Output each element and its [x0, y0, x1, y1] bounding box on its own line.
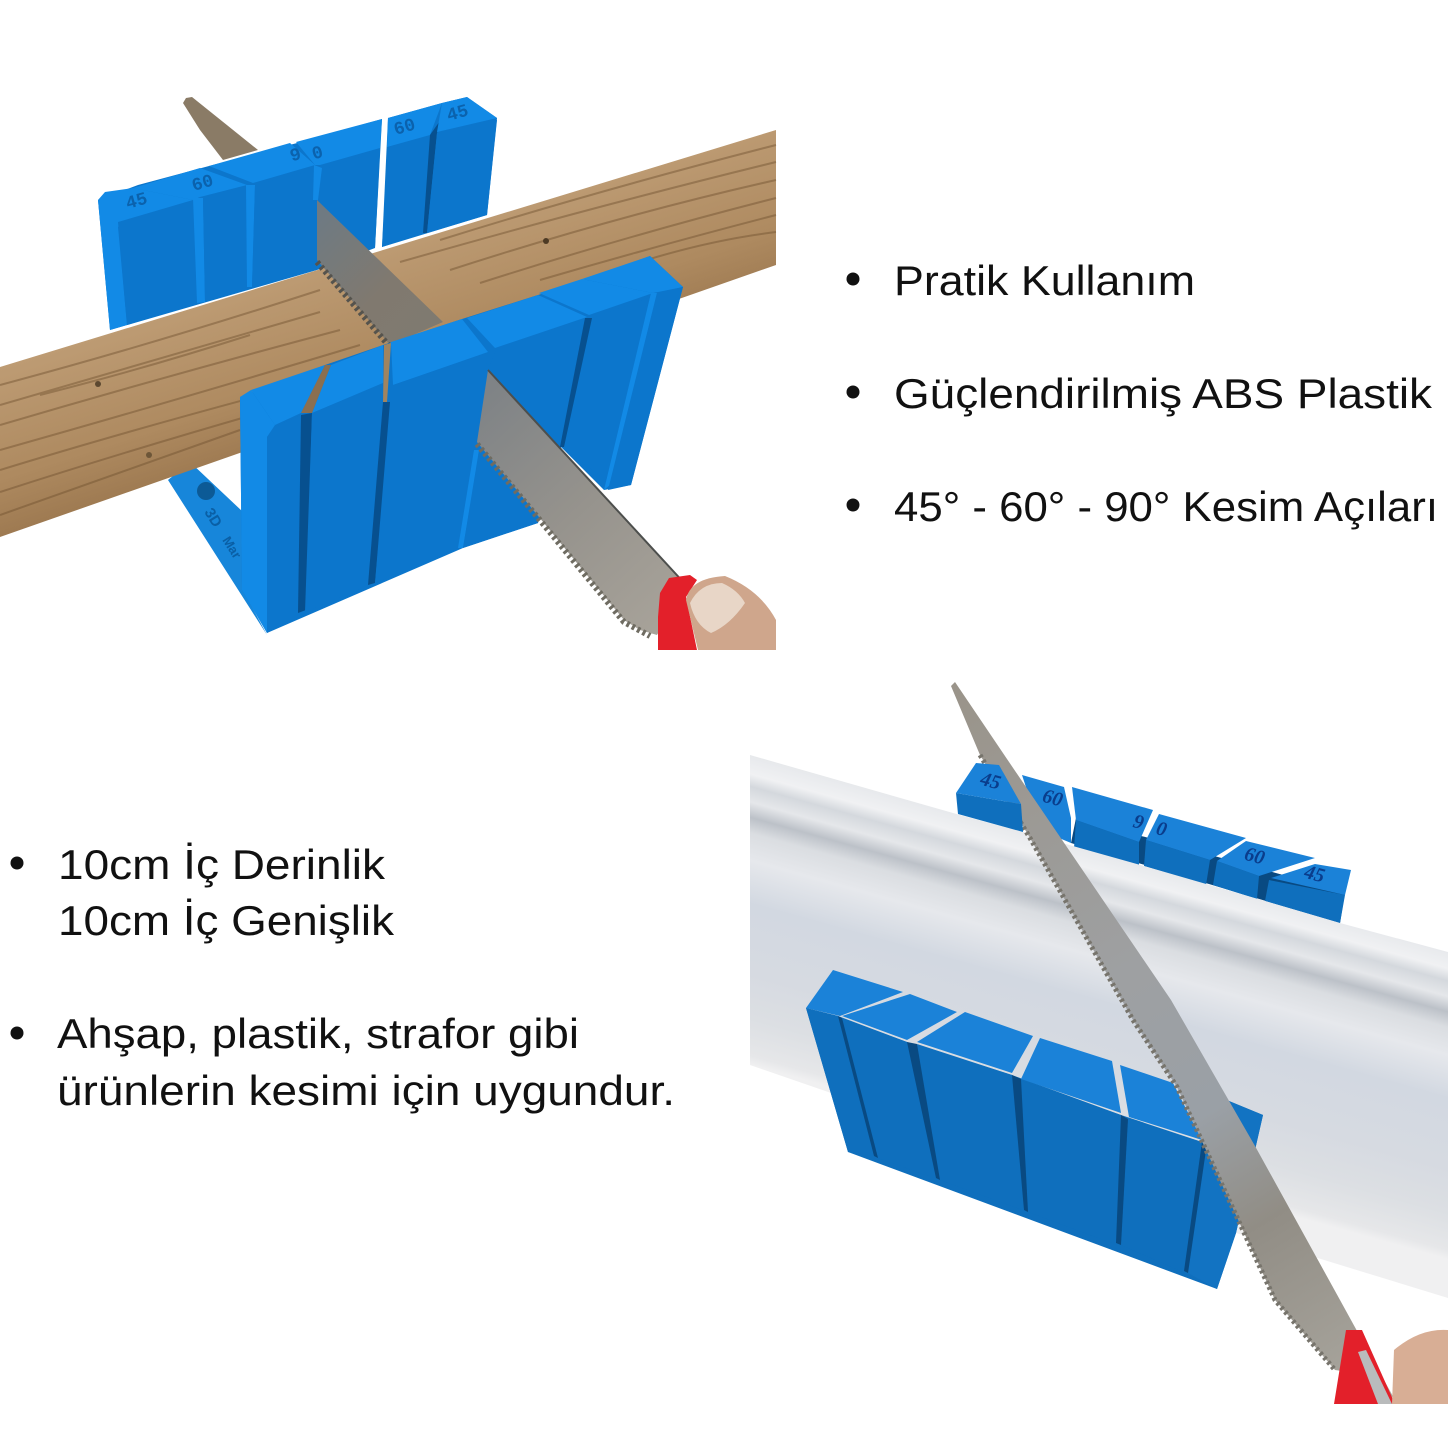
- feature list: bottom left: [10, 841, 675, 1114]
- photo: saw cutting white moulding in blue mitre box: [750, 682, 1448, 1404]
- wooden dowel: [0, 130, 776, 537]
- saw handle and hand: [1334, 1330, 1448, 1404]
- bullet: cutting angles: 45° - 60° - 90° Kesim Açıları: [894, 483, 1438, 530]
- bullet: reinforced ABS plastic: Güçlendirilmiş ABS Plastik: [894, 370, 1433, 417]
- mitre box back wall: 9: [288, 145, 304, 167]
- saw blade front section: [477, 370, 686, 636]
- mitre box back wall: 60: [1040, 785, 1065, 811]
- mitre box back wall: 60: [190, 172, 216, 197]
- mitre box back wall: 45: [445, 102, 471, 127]
- mitre box 45 degree block in front of blade: 45: [977, 768, 1003, 794]
- bullet: suitable materials: [10, 1010, 675, 1114]
- mitre box back wall: 0: [310, 143, 326, 165]
- mitre box front wall: [806, 970, 1263, 1289]
- saw blade rear section: [183, 97, 258, 160]
- mitre box base plate: Mar: [219, 534, 244, 561]
- saw handle and hand: [658, 575, 776, 650]
- mitre box back wall: [98, 97, 497, 330]
- saw blade: [951, 682, 1395, 1400]
- mitre box 45 degree block in front of blade: [956, 763, 1023, 832]
- mitre box back wall: [1022, 775, 1351, 923]
- mitre box back wall: 60: [392, 116, 418, 141]
- bullet: practical use: Pratik Kullanım: [894, 257, 1195, 304]
- photo: saw cutting wooden dowel in blue mitre box: [0, 97, 776, 650]
- feature list: top right: [846, 257, 1438, 530]
- white moulding: [750, 755, 1448, 1298]
- mitre box back wall: 45: [124, 190, 150, 215]
- mitre box back wall: 9: [1131, 810, 1146, 834]
- bullet: suitable materials: ürünlerin kesimi için uygundur.: [57, 1067, 675, 1114]
- mitre box base plate: [168, 462, 267, 635]
- bullet: inner depth and width: 10cm İç Derinlik: [58, 841, 386, 888]
- saw blade middle section: [317, 200, 443, 347]
- mitre box base plate: 3D: [201, 505, 225, 531]
- bullet: inner depth and width: [10, 841, 395, 944]
- mitre box front wall: [240, 256, 683, 633]
- bullet: suitable materials: Ahşap, plastik, strafor gibi: [57, 1010, 579, 1057]
- mitre box back wall: 60: [1242, 843, 1267, 869]
- bullet: inner depth and width: 10cm İç Genişlik: [58, 897, 395, 944]
- mitre box back wall: 0: [1154, 817, 1169, 841]
- mitre box back wall: 45: [1301, 861, 1327, 887]
